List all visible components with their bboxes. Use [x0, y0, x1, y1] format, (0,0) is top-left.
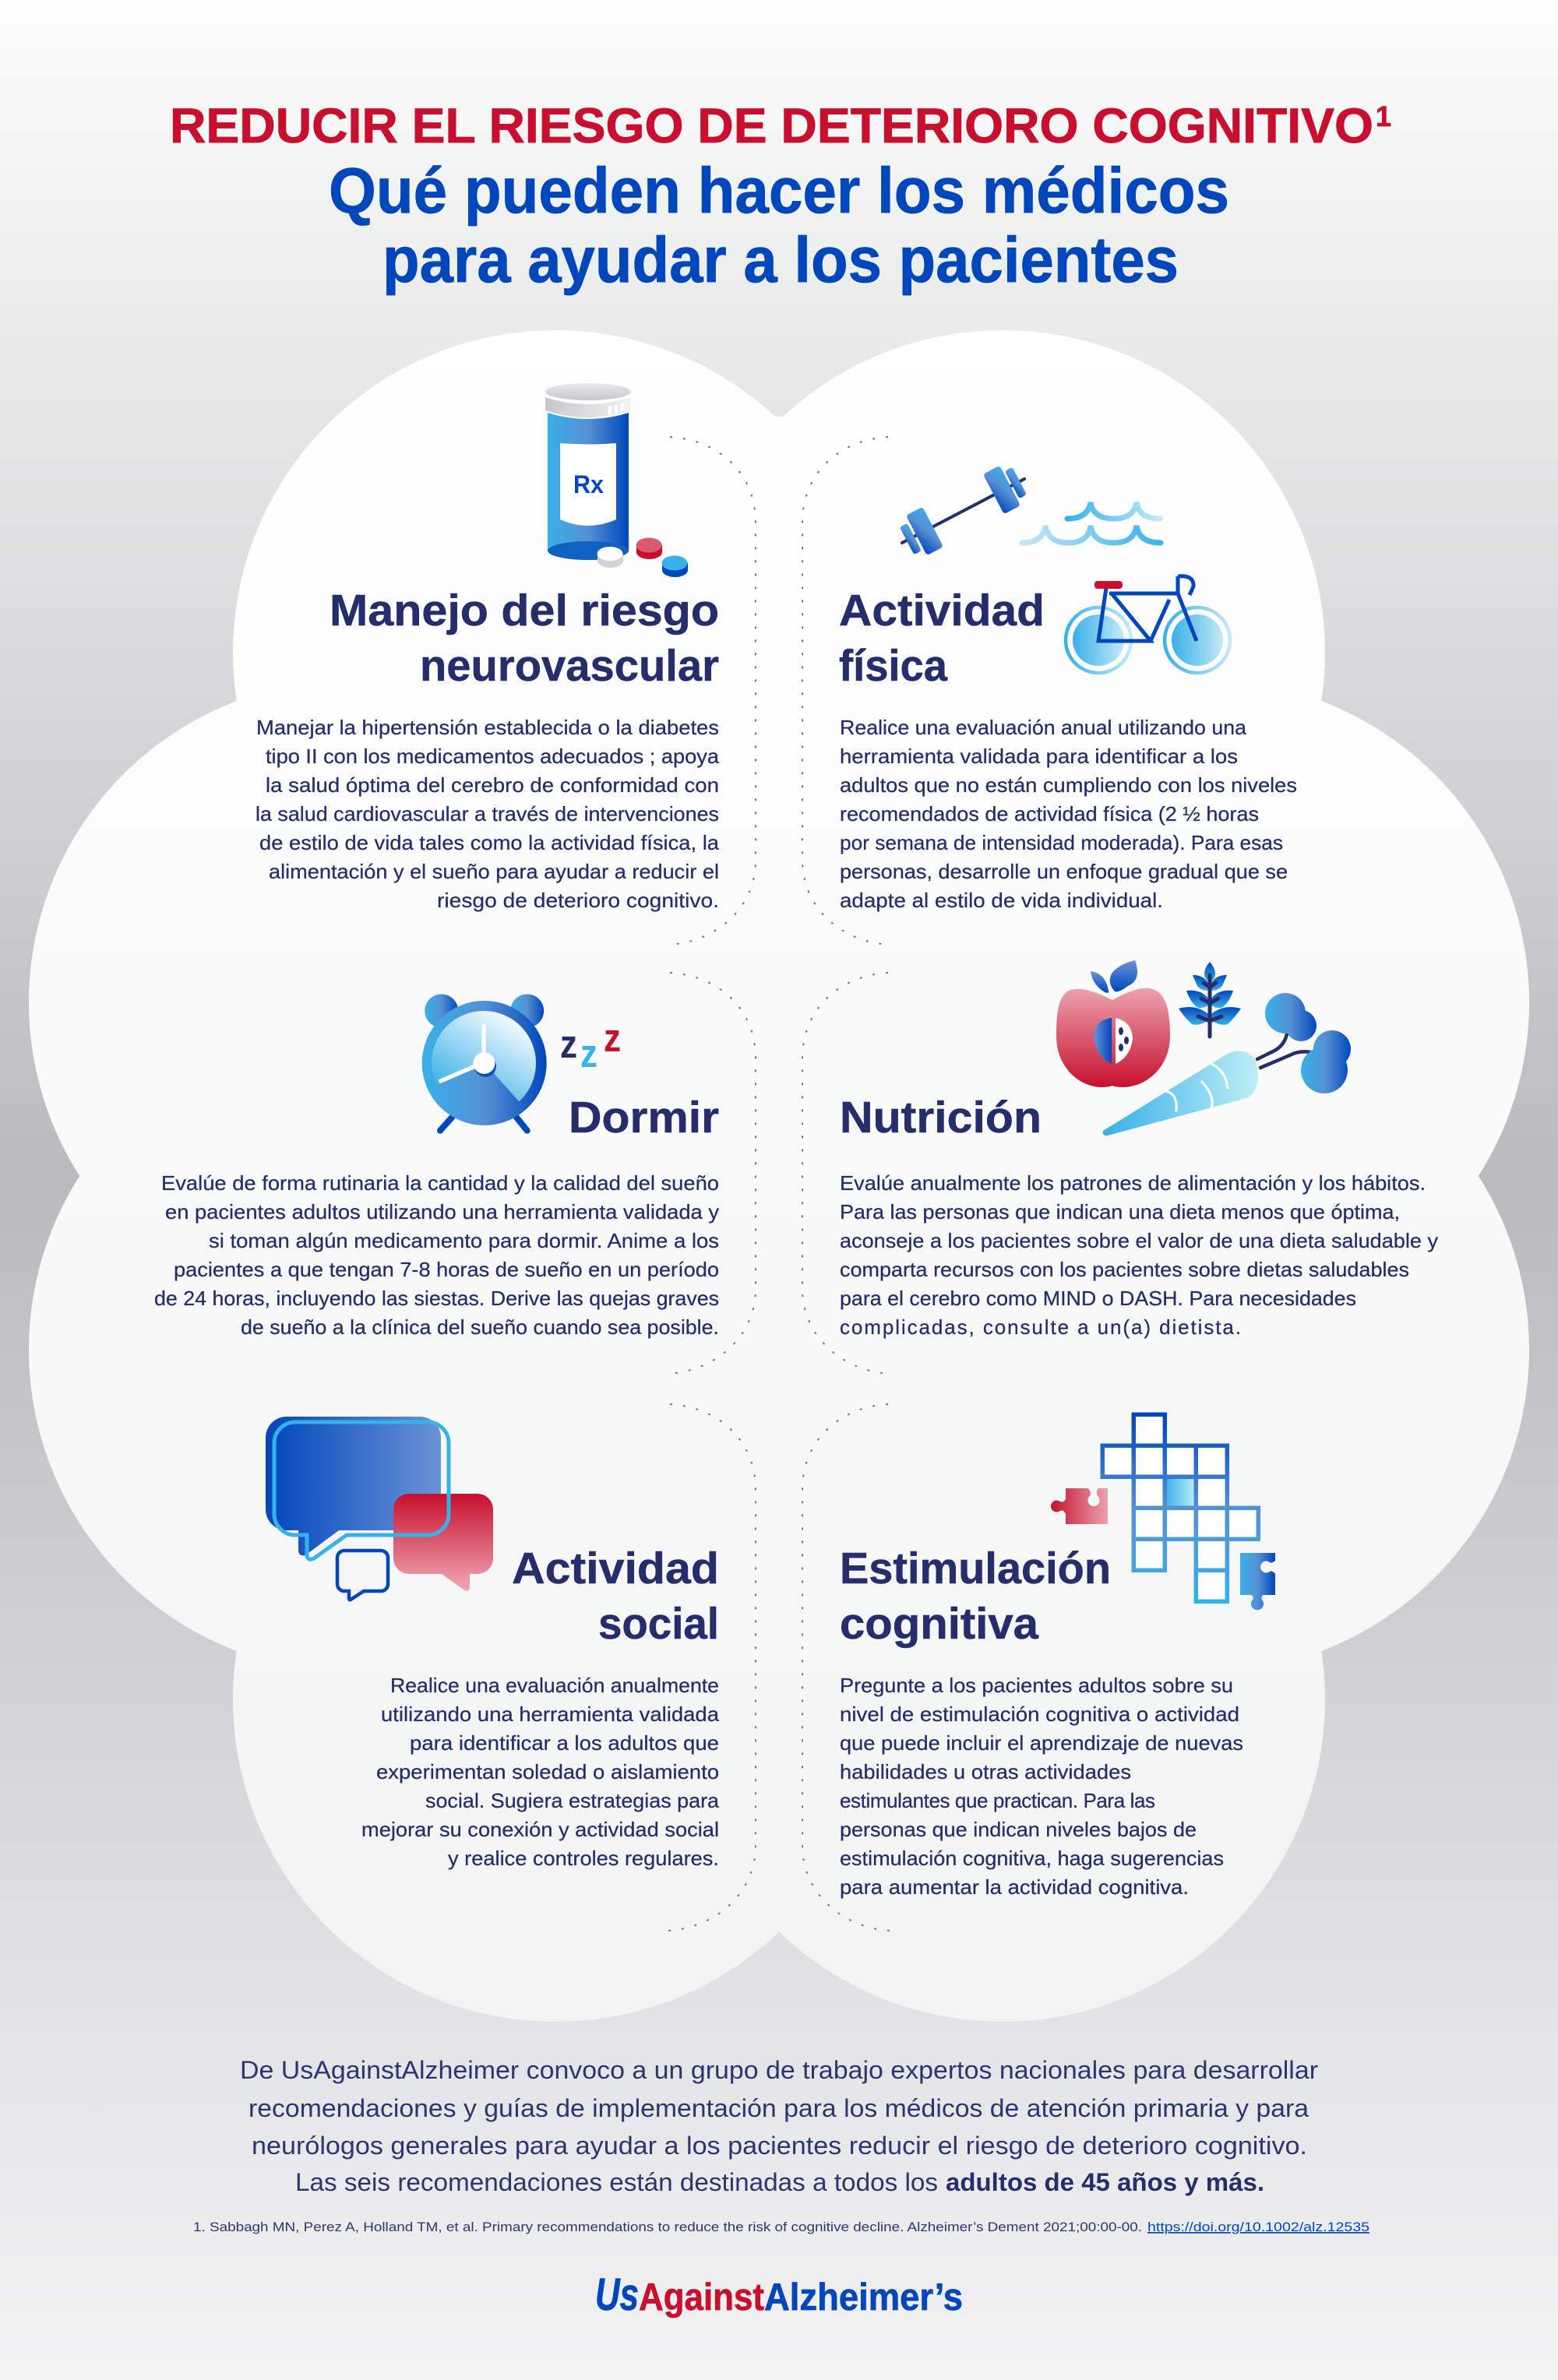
body text	[256, 716, 720, 912]
icon: speech bubbles	[266, 1417, 493, 1600]
closing paragraph: De UsAgainstAlzheimer convoco a un grupo de trabajo expertos nacionales para desarrollar	[240, 2056, 1318, 2084]
icon: apple	[1056, 960, 1170, 1087]
logo: UsAgainstAlzheimer's: Us	[595, 2269, 639, 2320]
body text	[840, 1171, 1438, 1339]
panel: nutrición	[840, 960, 1438, 1339]
body text: riesgo de deterioro cognitivo.	[437, 889, 719, 912]
heading: Actividad	[512, 1544, 719, 1593]
heading: Nutrición	[840, 1093, 1042, 1142]
body text: si toman algún medicamento para dormir. Anime a los	[209, 1229, 719, 1252]
panel: actividad física	[839, 466, 1297, 912]
icon: prescription bottle with pills: Rx	[573, 470, 604, 498]
icon: crossword grid	[1102, 1414, 1258, 1601]
heading	[512, 1544, 719, 1649]
body text: recomendados de actividad física (2 ½ horas	[840, 802, 1259, 826]
icon: sleeping z letters: z	[580, 1031, 597, 1076]
body text: aconseje a los pacientes sobre el valor de una dieta saludable y	[840, 1229, 1438, 1252]
body text: Realice una evaluación anualmente	[390, 1674, 719, 1697]
heading: social	[598, 1599, 719, 1649]
body text: estimulantes que practican. Para las	[840, 1789, 1155, 1812]
body text: Evalúe anualmente los patrones de alimentación y los hábitos.	[840, 1171, 1426, 1195]
heading	[839, 586, 1045, 691]
body text: personas, desarrolle un enfoque gradual que se	[840, 860, 1288, 883]
body text	[154, 1171, 719, 1339]
body text	[840, 1674, 1243, 1899]
body text	[361, 1674, 720, 1870]
body text: la salud cardiovascular a través de intervenciones	[256, 802, 719, 826]
icon: sleeping z letters: z	[560, 1022, 577, 1066]
body text: Manejar la hipertensión establecida o la diabetes	[256, 716, 719, 739]
body text: tipo II con los medicamentos adecuados ; apoya	[266, 745, 720, 768]
icon: herb sprig	[1179, 962, 1241, 1037]
title: red headline: 1	[1376, 100, 1391, 132]
icon: barbell	[900, 466, 1027, 555]
title: red headline: REDUCIR EL RIESGO DE DETERIORO COGNITIVO	[170, 99, 1373, 153]
body text: en pacientes adultos utilizando una herramienta validada y	[165, 1200, 719, 1223]
panel: manejo del riesgo neurovascular	[256, 383, 720, 912]
title: blue headline	[329, 154, 1229, 296]
panel: dormir	[154, 994, 719, 1339]
body text: que puede incluir el aprendizaje de nuevas	[840, 1731, 1243, 1755]
body text: nivel de estimulación cognitiva o actividad	[840, 1702, 1239, 1726]
body text: estimulación cognitiva, haga sugerencias	[840, 1847, 1224, 1870]
icon: sleeping z letters: z	[604, 1016, 621, 1060]
body text: personas que indican niveles bajos de	[840, 1818, 1197, 1841]
body text: experimentan soledad o aislamiento	[376, 1760, 719, 1783]
heading	[840, 1544, 1111, 1649]
heading: Dormir	[569, 1093, 719, 1142]
body text: social. Sugiera estrategias para	[425, 1789, 720, 1812]
body text: de estilo de vida tales como la actividad física, la	[259, 831, 720, 854]
closing paragraph: Las seis recomendaciones están destinadas a todos los	[295, 2168, 938, 2196]
body text: para aumentar la actividad cognitiva.	[840, 1875, 1189, 1899]
body text: habilidades u otras actividades	[840, 1760, 1131, 1783]
body text: por semana de intensidad moderada). Para esas	[840, 831, 1283, 854]
body text: adultos que no están cumpliendo con los niveles	[840, 773, 1297, 797]
body text: alimentación y el sueño para ayudar a reducir el	[269, 860, 719, 883]
title: blue headline: Qué pueden hacer los médicos	[329, 154, 1229, 227]
body text: mejorar su conexión y actividad social	[361, 1818, 719, 1841]
body text: de sueño a la clínica del sueño cuando sea posible.	[241, 1315, 719, 1339]
body text: herramienta validada para identificar a los	[840, 745, 1238, 768]
body text: Pregunte a los pacientes adultos sobre su	[840, 1674, 1233, 1697]
closing paragraph: adultos de 45 años y más.	[946, 2168, 1264, 2196]
white flower-shaped panel	[29, 330, 1529, 2022]
body text: comparta recursos con los pacientes sobre dietas saludables	[840, 1258, 1409, 1281]
body text: Evalúe de forma rutinaria la cantidad y la calidad del sueño	[161, 1171, 719, 1195]
heading: física	[839, 641, 948, 691]
heading: Estimulación	[840, 1544, 1111, 1593]
heading: Actividad	[839, 586, 1045, 635]
title block	[170, 99, 1391, 296]
body text: Para las personas que indican una dieta menos que óptima,	[840, 1200, 1400, 1223]
body text: complicadas, consulte a un(a) dietista.	[840, 1315, 1241, 1339]
body text	[840, 716, 1297, 912]
footnote: https://doi.org/10.1002/alz.12535	[1147, 2220, 1369, 2234]
closing paragraph	[240, 2056, 1318, 2196]
closing paragraph: neurólogos generales para ayudar a los pacientes reducir el riesgo de deterioro cognitivo.	[252, 2132, 1307, 2160]
icon: carrot with greens	[1103, 993, 1351, 1135]
body text: adapte al estilo de vida individual.	[840, 889, 1163, 912]
body text: la salud óptima del cerebro de conformidad con	[266, 773, 719, 797]
footnote: 1. Sabbagh MN, Perez A, Holland TM, et al. Primary recommendations to reduce the risk of cognitive decline. Alzheimer’s Dement 2021;00:00-00.	[193, 2220, 1142, 2234]
panel: estimulación cognitiva	[840, 1414, 1275, 1899]
logo: UsAgainstAlzheimer's	[595, 2269, 963, 2320]
heading: cognitiva	[840, 1599, 1039, 1649]
body text: y realice controles regulares.	[448, 1847, 719, 1870]
title: blue headline: para ayudar a los pacientes	[382, 224, 1179, 296]
logo: UsAgainstAlzheimer's: Against	[639, 2276, 764, 2318]
icon: alarm clock	[422, 994, 547, 1131]
body text: para el cerebro como MIND o DASH. Para necesidades	[840, 1287, 1356, 1310]
icon: blue puzzle piece	[1240, 1553, 1275, 1610]
body text: para identificar a los adultos que	[410, 1731, 719, 1755]
body text: utilizando una herramienta validada	[381, 1702, 720, 1726]
logo: UsAgainstAlzheimer's: Alzheimer’s	[764, 2276, 963, 2318]
icon: red puzzle piece	[1051, 1488, 1108, 1524]
panel: actividad social	[266, 1417, 720, 1870]
body text: pacientes a que tengan 7-8 horas de sueño en un período	[174, 1258, 719, 1281]
icon: water waves	[1022, 502, 1161, 543]
closing paragraph: recomendaciones y guías de implementación para los médicos de atención primaria y para	[249, 2094, 1309, 2122]
body text: Realice una evaluación anual utilizando una	[840, 716, 1247, 739]
icon: prescription bottle with pills	[545, 383, 688, 577]
body text: de 24 horas, incluyendo las siestas. Derive las quejas graves	[154, 1287, 719, 1310]
icon: bicycle	[1066, 576, 1230, 673]
heading: neurovascular	[420, 641, 719, 691]
icon: sleeping z letters	[560, 1016, 621, 1076]
heading: Manejo del riesgo	[330, 586, 719, 635]
heading	[330, 586, 719, 691]
